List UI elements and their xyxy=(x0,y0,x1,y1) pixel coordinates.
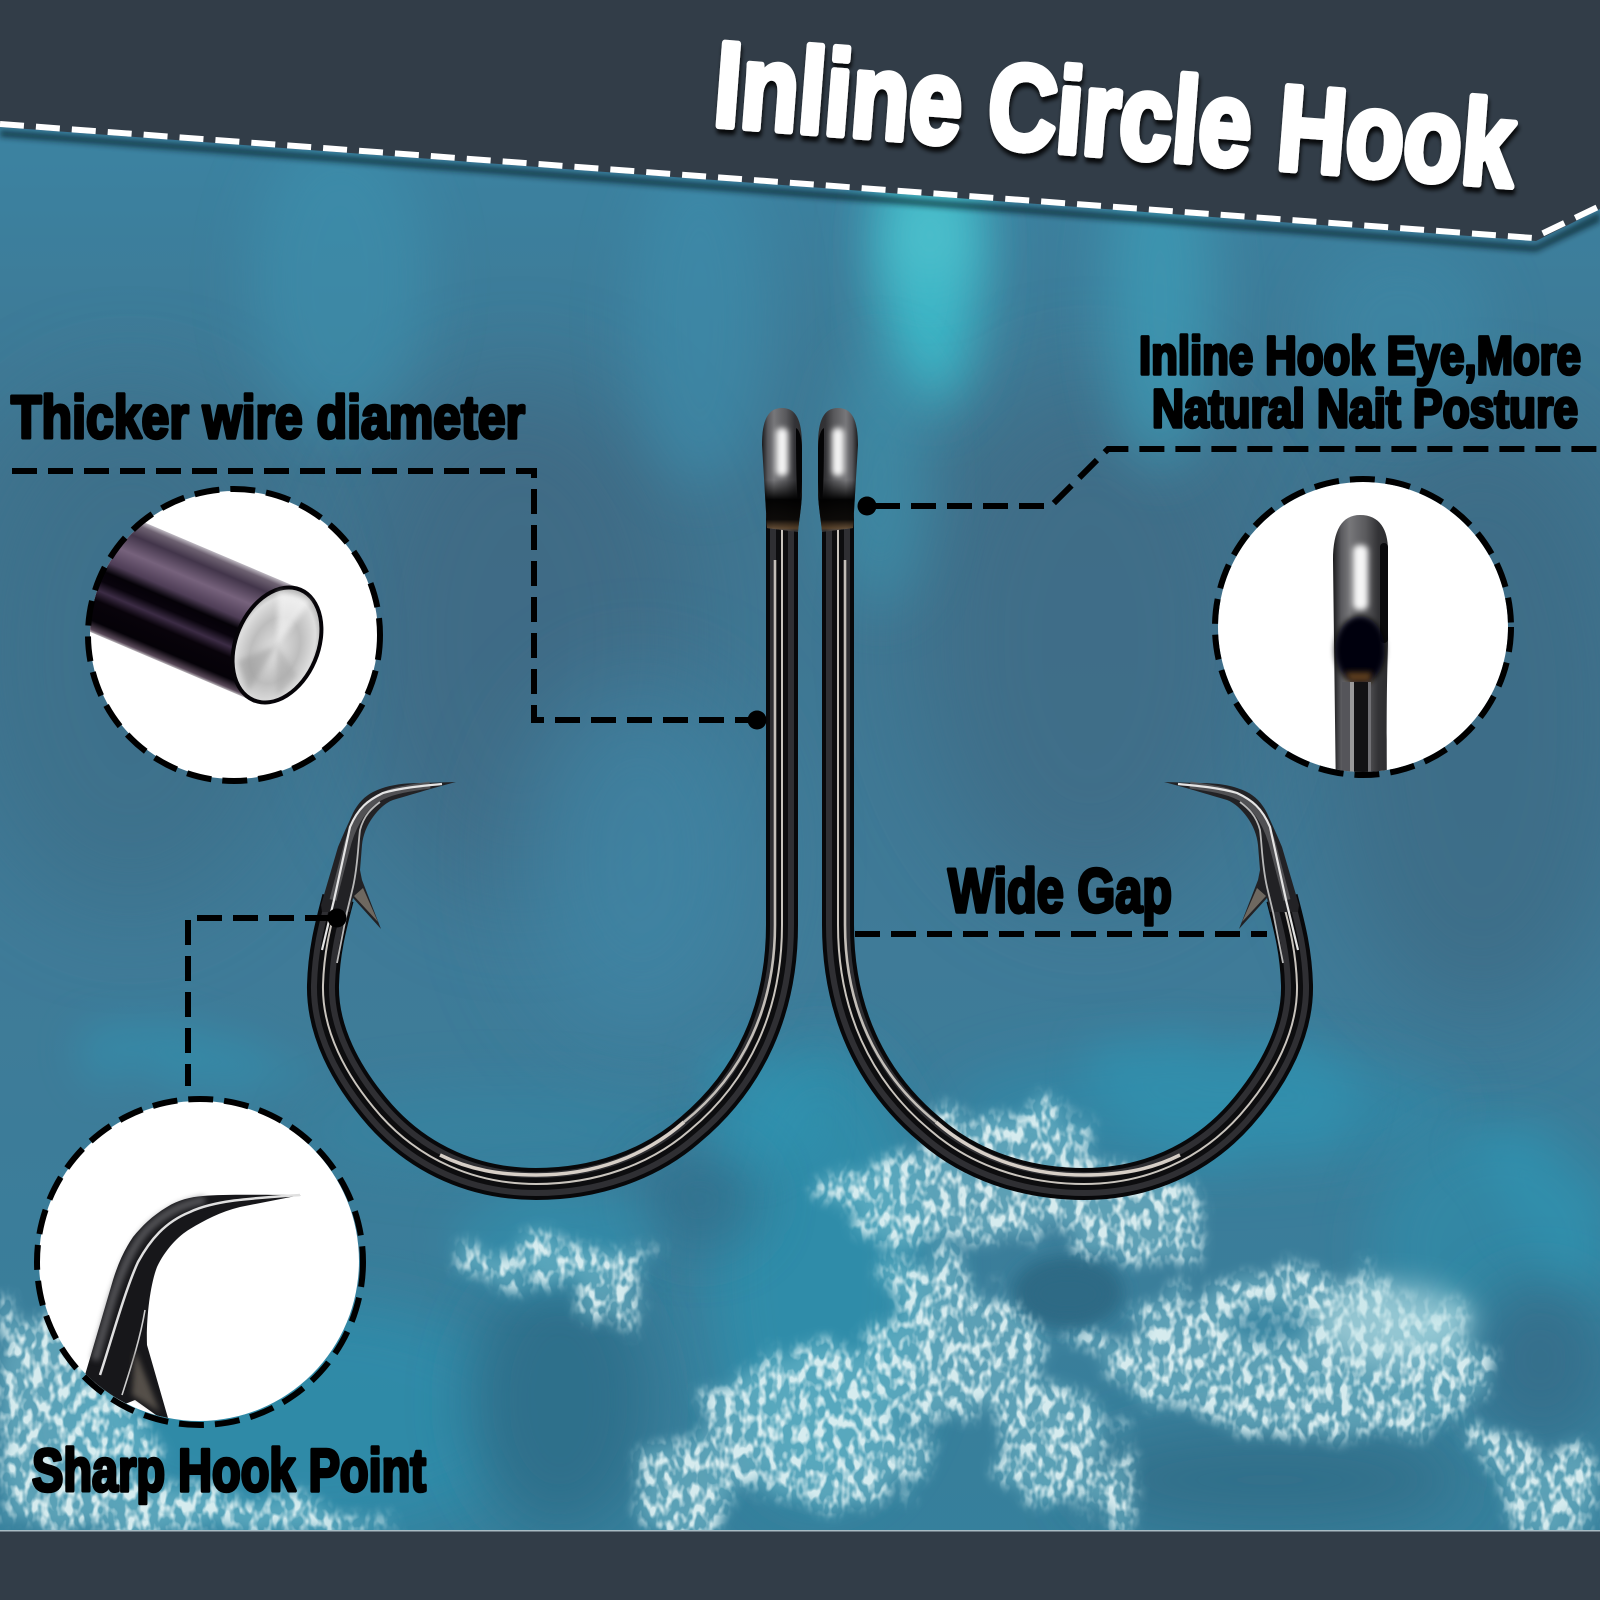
leader line: wire xyxy=(12,471,750,720)
inset: hook point close-up xyxy=(37,1099,363,1425)
right inline circle hook xyxy=(818,408,1299,1184)
marker dot: wire xyxy=(748,710,766,730)
callout: inline hook eye xyxy=(858,326,1600,800)
coral reef xyxy=(0,1024,1600,1533)
footer band xyxy=(0,1530,1600,1600)
leader line: eye xyxy=(875,449,1600,506)
measure line: gap xyxy=(855,931,1267,937)
label: wide gap: Wide Gap xyxy=(948,857,1172,926)
label: thicker wire diameter: Thicker wire diameter xyxy=(11,384,525,451)
inset: wire cross-section xyxy=(85,486,383,784)
leader line: point xyxy=(188,918,330,1086)
label: sharp hook point: Sharp Hook Point xyxy=(32,1437,426,1504)
marker dot: eye xyxy=(858,496,876,516)
left inline circle hook xyxy=(321,408,802,1184)
label: inline hook eye xyxy=(1139,326,1581,439)
inset: hook eye close-up xyxy=(1215,479,1511,800)
callout: sharp hook point xyxy=(32,908,426,1504)
callout: thicker wire diameter xyxy=(0,384,766,781)
marker dot: point xyxy=(328,908,346,928)
header band xyxy=(0,0,1600,252)
